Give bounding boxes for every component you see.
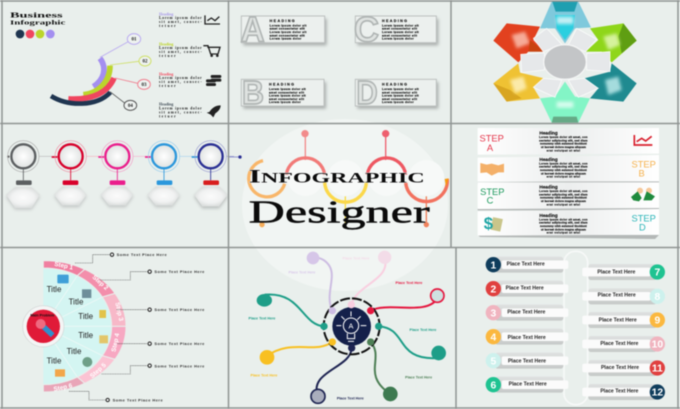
- callout text: Some Text Place Here: [113, 397, 163, 402]
- petal: green: [586, 23, 637, 62]
- text blocks: [159, 11, 202, 118]
- list text: Place Text Here: [507, 310, 545, 316]
- strip D: Heading: [539, 213, 558, 218]
- panel: radial idea map: [249, 251, 446, 403]
- strip C: Heading: [539, 185, 558, 190]
- ring segments: [43, 261, 126, 392]
- title labels: Title: [47, 356, 62, 365]
- strip A: STEP: [479, 134, 504, 144]
- box B: amet consectetur elit: [269, 97, 304, 101]
- list text: Place Text Here: [506, 286, 544, 292]
- box D: amet consectetur elit: [382, 90, 417, 94]
- strip C: [478, 182, 659, 210]
- icon: coins: [206, 75, 221, 86]
- strip C: STEP: [480, 187, 505, 197]
- backdrop: central pale disc: [242, 119, 448, 291]
- connector arrow end: [228, 155, 242, 159]
- heading: Designer: Designer: [249, 193, 430, 229]
- text blocks: sit amet, consec-: [159, 50, 202, 54]
- title labels: Title: [78, 331, 94, 340]
- dashed connectors: [69, 255, 147, 400]
- panel: process timeline: [6, 141, 234, 210]
- box C: [354, 11, 438, 50]
- text blocks: tetuer: [159, 84, 176, 88]
- box C: amet consectetur elit: [382, 27, 417, 31]
- panel: flower diagram: [493, 2, 637, 123]
- step 3 node: [98, 141, 146, 207]
- hub: main problem: Main Problem: [30, 313, 55, 317]
- callout text: Some Text Place Here: [154, 363, 205, 368]
- list text: Place Text Here: [508, 358, 546, 364]
- title: business infographic: Business: [10, 10, 63, 19]
- step 2 node: [52, 141, 99, 207]
- list text: [506, 262, 639, 395]
- step 1 node: [6, 141, 52, 210]
- callout markers: [106, 253, 151, 402]
- branch labels: Place Text Here: [396, 281, 422, 285]
- branch labels: Place Text Here: [249, 316, 275, 320]
- right column bars: [582, 264, 657, 400]
- icon: line chart: [205, 15, 220, 24]
- text blocks: sit amet, consec-: [159, 20, 202, 24]
- box C: amet consectetur elit: [382, 33, 417, 37]
- box A: amet consectetur elit: [270, 27, 305, 31]
- number badges: 7: [654, 268, 660, 279]
- branch labels: Place Text Here: [337, 397, 364, 401]
- box B: B: [242, 75, 264, 112]
- step labels: Step 1: [54, 261, 74, 272]
- strip B: Lorem ipsum dolor sit amet, con: [539, 161, 588, 165]
- strip A: Heading: [539, 131, 558, 136]
- petal: teal: [584, 63, 637, 102]
- callout text: Some Text Place Here: [154, 269, 205, 274]
- title: business infographic: Infographic: [10, 19, 65, 26]
- numbered markers: 04: [128, 104, 133, 109]
- box C: Lorem ipsum dolor sit: [382, 30, 419, 34]
- step labels: Step 2: [91, 274, 110, 292]
- strip A: A: [487, 143, 494, 153]
- title: business infographic: [10, 10, 65, 26]
- branch labels: Place Text Here: [410, 328, 436, 332]
- title labels: Title: [47, 285, 62, 294]
- panel: central title: [228, 130, 449, 229]
- box A: amet consectetur elit: [270, 33, 305, 37]
- box C: Lorem ipsum dolor: [382, 36, 414, 40]
- branch labels: [249, 257, 436, 401]
- text blocks: Lorem ipsum dolor: [159, 16, 202, 20]
- title labels: Title: [67, 347, 82, 356]
- box A: Lorem ipsum dolor sit: [270, 23, 306, 27]
- number badges: 9: [654, 316, 660, 327]
- number badges: 6: [490, 380, 496, 391]
- strip B: nonummy nibh euismod tincidunt: [540, 168, 587, 172]
- box D: [355, 75, 438, 112]
- curved arc chart: [51, 58, 114, 104]
- strip D: sectetur adipiscing elit, sed diam: [539, 221, 588, 225]
- central bulb hub: [320, 298, 382, 354]
- number badges: 2: [490, 284, 496, 295]
- text blocks: Heading: [159, 41, 173, 46]
- inner half disc: [43, 268, 112, 385]
- step labels: Step 3: [113, 302, 124, 322]
- strip B: sectetur adipiscing elit, sed diam: [539, 165, 588, 169]
- branch labels: Place Text Here: [343, 257, 369, 261]
- panel: steps A to D: [478, 128, 659, 239]
- petal: yellow: [493, 63, 544, 102]
- strip D: $: [484, 214, 494, 233]
- small icons: [55, 275, 108, 377]
- heading: Infographic: INFOGRAPHIC: [249, 166, 425, 187]
- strip D: ut laoreet dolore magna aliquam: [541, 227, 586, 231]
- strip B: B: [639, 168, 645, 178]
- step labels: Step 6: [53, 382, 74, 393]
- strip B: [478, 155, 659, 184]
- box B: Lorem ipsum dolor sit: [269, 87, 306, 91]
- panel: A B C D labels: [241, 11, 438, 112]
- strip B: Heading: [539, 157, 558, 162]
- box C: C: [354, 11, 379, 50]
- strip C: Lorem ipsum dolor sit amet, con: [539, 189, 588, 193]
- branch labels: Place Text Here: [289, 271, 315, 275]
- box A: Lorem ipsum dolor sit: [270, 30, 306, 34]
- number badges: 12: [652, 388, 663, 399]
- box C: HEADING: [382, 19, 407, 23]
- list text: Place Text Here: [601, 365, 639, 371]
- strip D: STEP: [631, 214, 656, 224]
- text blocks: tetuer: [159, 24, 176, 28]
- box B: Lorem ipsum dolor: [269, 100, 301, 104]
- list text: Place Text Here: [598, 293, 636, 299]
- hub: main problem: [23, 306, 64, 347]
- strip B: STEP: [631, 160, 656, 170]
- list text: Place Text Here: [600, 389, 638, 395]
- box A: [241, 11, 327, 50]
- text blocks: sit amet, consec-: [159, 110, 202, 114]
- strip D: D: [639, 222, 646, 232]
- number badges: 10: [652, 340, 663, 351]
- strip D: [478, 209, 659, 239]
- callout text: Some Text Place Here: [117, 252, 167, 257]
- box D: Lorem ipsum dolor sit: [382, 94, 419, 98]
- list text: Place Text Here: [508, 335, 546, 341]
- box C: Lorem ipsum dolor sit: [382, 23, 419, 27]
- number badges: 4: [490, 332, 496, 343]
- box D: Lorem ipsum dolor: [382, 100, 414, 104]
- centre hub with white segments: [521, 28, 610, 97]
- strip B: erat volutpat ut wisi: [547, 175, 580, 179]
- numbered markers: 03: [142, 83, 147, 88]
- strip A: sectetur adipiscing elit, sed diam: [539, 138, 588, 142]
- list text: Place Text Here: [599, 317, 637, 323]
- strip A: Lorem ipsum dolor sit amet, con: [539, 135, 588, 139]
- step 5 node: [192, 141, 234, 208]
- text blocks: Lorem ipsum dolor: [159, 46, 202, 50]
- numbered markers: 01: [132, 38, 137, 43]
- strip C: erat volutpat ut wisi: [547, 202, 580, 206]
- strip D: Lorem ipsum dolor sit amet, con: [539, 217, 588, 221]
- ring chain: [249, 130, 449, 227]
- segment dividers: [43, 276, 112, 377]
- strip A: [478, 128, 659, 155]
- step labels: Step 4: [110, 332, 121, 353]
- text blocks: sit amet, consec-: [159, 80, 202, 84]
- strip D: nonummy nibh euismod tincidunt: [540, 224, 587, 228]
- title labels: Title: [78, 312, 94, 321]
- box D: amet consectetur elit: [382, 97, 417, 101]
- box D: D: [356, 75, 378, 112]
- numbered markers: 02: [143, 60, 148, 65]
- number badges: [486, 257, 665, 400]
- callout text: [113, 252, 205, 402]
- text blocks: Heading: [159, 102, 173, 107]
- text blocks: tetuer: [159, 54, 176, 58]
- number badges: 8: [654, 292, 660, 303]
- box D: HEADING: [382, 83, 407, 87]
- box D: Lorem ipsum dolor sit: [382, 87, 419, 91]
- panel: semicircle steps: [23, 252, 205, 402]
- step labels: Step 5: [89, 362, 108, 380]
- list text: Place Text Here: [597, 269, 635, 275]
- strip A: erat volutpat ut wisi: [547, 148, 580, 152]
- text blocks: tetuer: [159, 114, 176, 118]
- colour dots: [16, 30, 55, 38]
- box A: Lorem ipsum dolor: [270, 36, 302, 40]
- strip C: ut laoreet dolore magna aliquam: [541, 199, 586, 203]
- strip C: nonummy nibh euismod tincidunt: [540, 196, 587, 200]
- box A: A: [241, 11, 265, 50]
- box B: HEADING: [269, 83, 294, 87]
- icon: rocket: [207, 105, 221, 117]
- number badges: 11: [652, 364, 663, 375]
- title labels: Title: [69, 298, 84, 307]
- connector loop: [564, 251, 588, 405]
- callout text: Some Text Place Here: [154, 341, 205, 346]
- panel: business infographic: [10, 10, 221, 118]
- branch labels: Place Text Here: [405, 376, 432, 380]
- panel: numbered list: [486, 251, 665, 405]
- icon: cart: [203, 46, 220, 56]
- number badges: 3: [490, 308, 496, 319]
- number badges: 1: [490, 260, 496, 271]
- box B: [241, 75, 326, 112]
- number badges: 5: [490, 356, 496, 367]
- petal: mint: [540, 82, 590, 123]
- step labels: [53, 261, 124, 393]
- list text: Place Text Here: [600, 341, 638, 347]
- box B: amet consectetur elit: [269, 90, 304, 94]
- strip C: sectetur adipiscing elit, sed diam: [539, 192, 588, 196]
- box A: HEADING: [270, 19, 295, 23]
- title labels: [47, 285, 94, 365]
- strip A: nonummy nibh euismod tincidunt: [540, 142, 587, 146]
- strip A: ut laoreet dolore magna aliquam: [541, 145, 586, 149]
- list text: Place Text Here: [507, 262, 545, 268]
- left column bars: [495, 257, 568, 393]
- step 4 node: [145, 141, 192, 207]
- numbered markers: [100, 34, 151, 110]
- strip B: ut laoreet dolore magna aliquam: [541, 171, 586, 175]
- text blocks: Heading: [159, 11, 173, 16]
- text blocks: Heading: [159, 71, 173, 76]
- branch labels: Place Text Here: [251, 374, 277, 378]
- central bulb hub: A: [349, 321, 354, 330]
- list text: Place Text Here: [509, 382, 547, 388]
- callout text: Some Text Place Here: [154, 307, 205, 312]
- text blocks: Lorem ipsum dolor: [159, 106, 202, 110]
- petal: cyan: [540, 2, 591, 43]
- petal: red: [493, 23, 544, 62]
- end nodes: [257, 251, 446, 403]
- strip C: C: [487, 196, 494, 206]
- curved branches: [265, 257, 439, 396]
- strip D: erat volutpat ut wisi: [547, 231, 580, 235]
- box B: Lorem ipsum dolor sit: [269, 94, 306, 98]
- text blocks: Lorem ipsum dolor: [159, 76, 202, 80]
